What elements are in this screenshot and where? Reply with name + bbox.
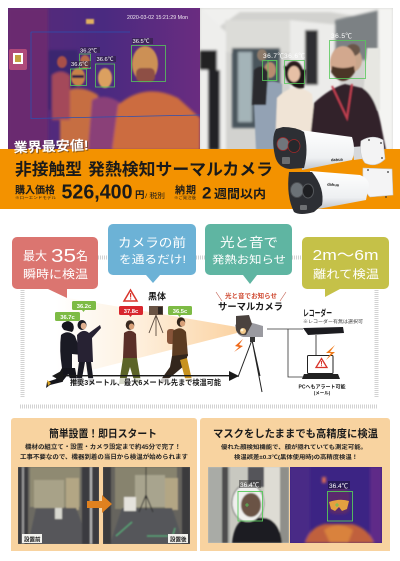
icon: recorder: [303, 327, 344, 335]
panel body: accurate with mask: 優れた顔検知機能で、顔が隠れていても測定可能。: [221, 443, 367, 451]
delivery info: 2: [202, 184, 211, 202]
distance arrow: 推奨3メートル、最大6メートル先まで検温可能: [70, 378, 222, 387]
catch line: 業界最安値!: [14, 139, 90, 156]
connection lines: [267, 329, 316, 377]
callout: 2m to 6m: 2m〜6m: [312, 247, 378, 264]
people: feverish walker: [119, 320, 141, 384]
delivery info: [174, 184, 266, 202]
price info: [15, 182, 165, 204]
thermal camera label: [216, 291, 286, 312]
photo: thermal mask person: [290, 467, 382, 543]
main title: 非接触型: [15, 160, 82, 179]
blackbody label: 黒体: [148, 290, 166, 302]
photo: after installation: [103, 467, 190, 544]
icon: laptop with alert: [302, 345, 340, 379]
temperature tags: [55, 301, 192, 323]
callout: light and sound: [205, 224, 292, 284]
photo: thermal camera view: [8, 8, 200, 150]
delivery info: 納期: [175, 184, 196, 196]
photo: thermal camera view: 2020-03-02 15:21:29 Mon: [127, 15, 188, 21]
photo: visible light camera view: [200, 8, 393, 150]
temperature tags: 36.5c: [173, 309, 188, 315]
callout: max 35 people: 名: [76, 248, 88, 263]
photo: visible helmet person: [208, 467, 289, 543]
delivery info: ※ご発注後: [174, 195, 196, 200]
photo: thermal camera view: 36.2℃: [80, 48, 97, 54]
callout: light and sound: 光と音で: [220, 235, 278, 250]
photo: after installation: 設置後: [170, 536, 187, 544]
callout: max 35 people: [12, 237, 98, 298]
photo: visible light camera view: 36.7℃: [263, 52, 284, 60]
panel body: accurate with mask: 検温誤差±0.3℃(黒体使用時)の高精度検温！: [234, 453, 358, 461]
panel: easy setup: [11, 418, 197, 551]
callout: max 35 people: 最大: [23, 249, 47, 263]
beam cone: [56, 296, 237, 379]
panel heading: easy setup: 簡単設置！即日スタート: [49, 427, 157, 440]
icon: blackbody device: [149, 306, 163, 336]
callout: pass in front of camera: [108, 224, 196, 283]
product: thermal camera top: dahua: [331, 157, 344, 162]
price info: 購入価格: [15, 184, 55, 196]
temperature tags: 36.7c: [60, 315, 76, 321]
icon: alarm bolt camera: [234, 339, 243, 352]
recorder label: ※レコーダー有無は選択可: [303, 318, 364, 325]
price info: 円: [135, 190, 145, 201]
main title: [15, 160, 273, 179]
photo: visible light camera view: 36.5℃: [331, 32, 352, 40]
panel body: easy setup: 工事不要なので、機器到着の当日から検温が始められます: [20, 453, 188, 461]
product: thermal camera bottom: [288, 168, 393, 214]
photo: thermal mask person: 36.4℃: [329, 482, 349, 490]
main title: 発熱検知サーマルカメラ: [88, 160, 273, 179]
panel: accurate with mask: [200, 418, 390, 551]
arrow: before to after: [87, 495, 112, 513]
PC alert caption: [299, 384, 345, 396]
people: walker with backpack: [160, 317, 192, 384]
photo: visible light camera view: 36.6℃: [284, 52, 305, 60]
callout: pass in front of camera: を通るだけ!: [119, 253, 186, 266]
thermal camera label: 光と音でお知らせ: [225, 291, 277, 300]
callout: pass in front of camera: カメラの前: [118, 235, 186, 250]
panel heading: accurate with mask: マスクをしたままでも高精度に検温: [213, 427, 378, 440]
callout: max 35 people: 35: [51, 246, 76, 266]
orange price band: [0, 149, 400, 209]
callout: max 35 people: 瞬時に検温: [23, 267, 89, 281]
panel body: easy setup: 機材の組立て・設置・カメラ設定まで約45分で完了！: [25, 443, 181, 451]
icon: warning triangle: [124, 290, 137, 301]
price info: / 税別: [145, 191, 165, 200]
recorder label: [303, 307, 364, 325]
PC alert caption: PCへもアラート可能: [299, 384, 345, 390]
people: two walkers in black: [46, 320, 101, 388]
distance arrow: [52, 370, 239, 387]
catch line: 業界最安値!: [13, 138, 89, 155]
product: thermal camera top: [273, 127, 385, 170]
callout: 2m to 6m: [302, 237, 389, 297]
product: thermal camera bottom: dahua: [327, 182, 340, 187]
panel body: accurate with mask: [221, 443, 367, 461]
panel body: easy setup: [20, 443, 188, 461]
thermal reference marker: [9, 49, 27, 70]
temperature tags: 36.2c: [77, 304, 92, 310]
price info: ※ローエンドモデル: [15, 195, 56, 200]
photo: before installation: 設置前: [24, 536, 41, 544]
callout: light and sound: 発熱お知らせ: [212, 253, 286, 266]
photo: thermal camera view: 36.5℃: [132, 38, 150, 45]
photo: thermal camera view: 36.6℃: [71, 61, 88, 68]
dotted guide lines: [20, 258, 378, 406]
icon: thermal camera on tripod: [235, 315, 263, 392]
photo: thermal camera view: 36.6℃: [96, 56, 114, 63]
photo: visible helmet person: 36.4℃: [240, 481, 260, 489]
temperature tags: 37.8c: [124, 309, 139, 315]
recorder label: レコーダー: [303, 307, 332, 318]
price info: 526,400: [62, 182, 132, 204]
PC alert caption: (メール): [314, 390, 331, 396]
thermal camera label: サーマルカメラ: [218, 301, 283, 312]
delivery info: 週間以内: [214, 186, 266, 201]
photo: before installation: [18, 467, 99, 544]
callout: 2m to 6m: 離れて検温: [313, 267, 380, 281]
